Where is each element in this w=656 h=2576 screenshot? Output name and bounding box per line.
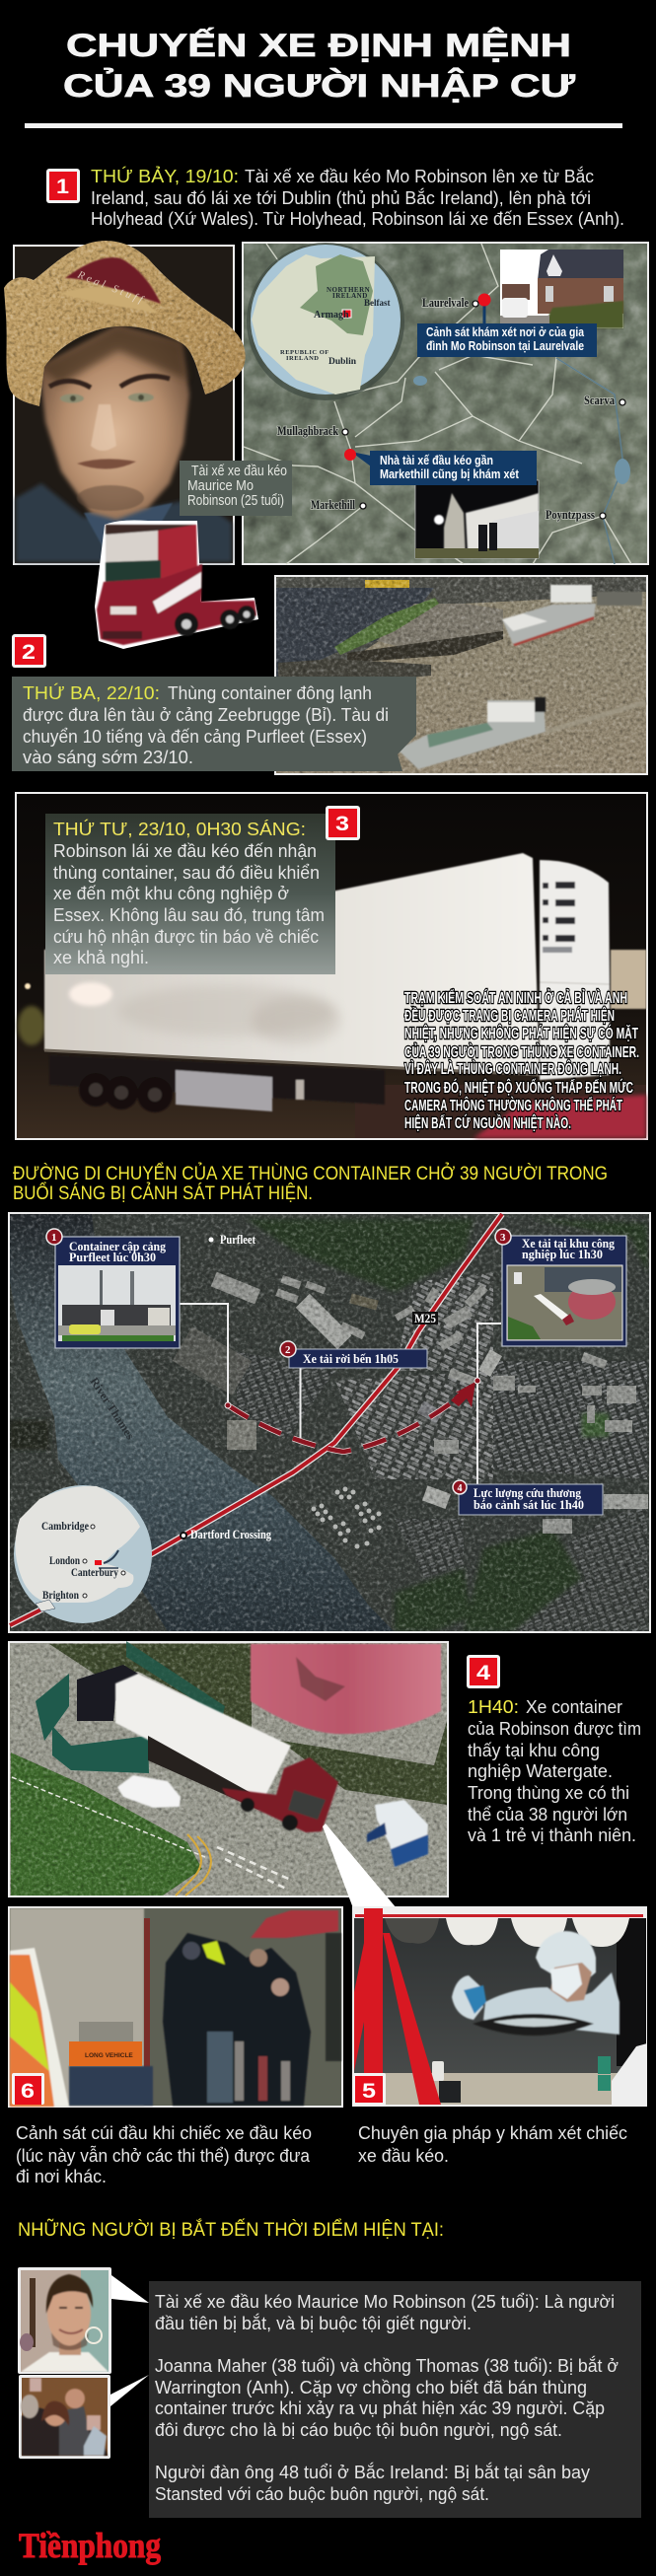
driver label: Maurice Mo (187, 477, 254, 494)
step 1 text (91, 166, 624, 229)
globe inset (247, 243, 404, 400)
title (63, 28, 576, 104)
step 3 text box: cứu hộ nhận được tin báo về chiếc (53, 926, 319, 947)
label: Purfleet (209, 1233, 256, 1247)
route heading (13, 1161, 608, 1204)
panel: driver portrait: Real Stuff (75, 268, 146, 307)
panel: aerial photo of truck at Watergate (8, 1641, 449, 1897)
panel: forensic expert in cab photo (352, 1906, 647, 2107)
step 5 badge: 5 (362, 2080, 376, 2103)
map place labels (277, 394, 625, 522)
step 4 text: Xe container (526, 1696, 622, 1717)
step 1 text: Holyhead (Xứ Wales). Từ Holyhead, Robinson lái xe đến Essex (Anh). (91, 208, 624, 229)
driver label (180, 461, 292, 516)
arrests text box: Người đàn ông 48 tuổi ở Bắc Ireland: Bị bắt tại sân bay (155, 2462, 591, 2482)
step 4 text: của Robinson được tìm (468, 1718, 641, 1739)
arrests text box: đầu tiên bị bắt, và bị buộc tội giết người. (155, 2313, 472, 2333)
callout: Markethill search: Nhà tài xế đầu kéo gần (380, 454, 493, 467)
house photo (500, 250, 623, 328)
vegetation behind truck (49, 1644, 447, 1805)
pointer: Mahers to text (110, 2375, 149, 2406)
pointer to cab photo (323, 1824, 397, 1908)
step 6 badge (12, 2073, 44, 2105)
callout: Markethill search (344, 449, 537, 485)
step 3 text box: Robinson lái xe đầu kéo đến nhận (53, 840, 317, 861)
step 3 text box: Essex. Không lâu sau đó, trung tâm (53, 904, 325, 925)
arrests text box (149, 2281, 641, 2518)
callout 2: truck leaves: Xe tải rời bến 1h05 (303, 1352, 399, 1366)
trailer body (44, 853, 540, 1075)
arrests text box: đôi được cho là bị cáo buộc tội buôn người, ngộ sát. (155, 2419, 562, 2440)
van with chevrons (10, 1948, 69, 2107)
callout 4: rescue alerts police: Lực lượng cứu thương (474, 1486, 582, 1500)
canopy and fence (77, 1665, 138, 1721)
step 4 text: thể của 38 người lớn (468, 1804, 627, 1825)
step 2 badge (12, 634, 46, 668)
label: Dartford Crossing: Dartford Crossing (190, 1528, 272, 1541)
face (39, 325, 189, 520)
callout: Markethill search: Markethill cũng bị khám xét (380, 467, 520, 481)
map place labels: Markethill (311, 498, 355, 512)
callout 1: container arrives: Purfleet lúc 0h30 (69, 1251, 156, 1264)
port land and mudflat (276, 577, 646, 682)
arrests text box: Stansted với cáo buộc buôn người, ngộ sát. (155, 2483, 489, 2504)
forensic expert (452, 1931, 620, 2036)
satellite base layer (10, 1214, 649, 1631)
green land patches (10, 1219, 647, 1631)
step 4 text: nghiệp Watergate. (468, 1760, 613, 1781)
red grille stripes (354, 1908, 441, 2106)
title: CHUYẾN XE ĐỊNH MỆNH (66, 28, 571, 63)
south-east England inset map: Brighton (42, 1590, 80, 1602)
south-east England inset map: London (49, 1555, 80, 1567)
pointer: Robinson to text (111, 2275, 149, 2303)
caption: police bow heads: (lúc này vẫn chở các thi thể) được đưa (16, 2145, 311, 2166)
step 1 badge (46, 169, 80, 203)
globe inset: Dublin (328, 357, 357, 367)
caption: police bow heads (16, 2122, 312, 2186)
south-east England inset map: Canterbury (71, 1567, 118, 1579)
globe inset: NORTHERN (327, 286, 370, 294)
river Thames (10, 1214, 394, 1631)
connector lines (180, 1304, 501, 1484)
panel: police at scene photo: LONG VEHICLE (85, 2052, 133, 2059)
driver label: Tài xế xe đầu kéo (191, 463, 287, 479)
step 4 text: 1H40: (468, 1696, 519, 1717)
callout: Laurelvale search: đình Mo Robinson tại Laurelvale (426, 339, 584, 353)
oil storage tank farm (312, 1487, 381, 1548)
road network (244, 244, 631, 564)
step 3 badge: 3 (335, 813, 349, 835)
callout 3: truck at industrial park (495, 1229, 626, 1346)
callout 3: truck at industrial park: Xe tải tại khu công (522, 1237, 616, 1251)
callout 4: rescue alerts police: báo cảnh sát lúc 1h40 (474, 1498, 584, 1512)
undercarriage and wheels (49, 1055, 385, 1112)
step 2 text box: vào sáng sớm 23/10. (23, 747, 193, 767)
panel: Northern Ireland map (242, 242, 649, 565)
callout 1: container arrives: 1 (51, 1232, 57, 1244)
jacket (16, 483, 232, 562)
driver label: Robinson (25 tuổi) (187, 492, 284, 509)
red tractor cab (222, 1757, 338, 1832)
step 3 text box: xe đến một khu công nghiệp ở (53, 883, 289, 903)
thermal camera note (404, 989, 639, 1132)
callout: Laurelvale search: Cảnh sát khám xét nơi ở của gia (426, 325, 585, 339)
callout 4: rescue alerts police (453, 1480, 603, 1515)
panel: aerial route map (8, 1212, 651, 1633)
map place labels: Mullaghbrack (277, 424, 338, 438)
thermal camera note: HIỆN BẤT CỨ NGUỒN NHIỆT NÀO. (404, 1114, 571, 1132)
globe inset: Armagh (314, 310, 349, 321)
callout 2: truck leaves: 2 (285, 1344, 291, 1356)
label: Purfleet: Purfleet (220, 1233, 256, 1247)
step 4 text (468, 1696, 641, 1845)
callout 1: container arrives (46, 1229, 180, 1348)
M25 label: M25 (414, 1312, 436, 1325)
step 2 text box: chuyển 10 tiếng và đến cảng Purfleet (Essex) (23, 726, 367, 747)
globe inset: IRELAND (286, 355, 319, 362)
callout 3: truck at industrial park: nghiệp lúc 1h30 (522, 1248, 603, 1261)
caption: forensic expert (358, 2122, 627, 2166)
urban texture areas (493, 1361, 647, 1479)
step 4 text: Trong thùng xe có thi (468, 1782, 629, 1803)
callout 4: rescue alerts police: 4 (458, 1483, 462, 1494)
logo: Tiền Phong: Tiềnphong (19, 2526, 161, 2565)
forensic tent (367, 1800, 428, 1867)
refrigeration unit (540, 860, 610, 1080)
night house photo (415, 480, 539, 558)
globe inset: REPUBLIC OF (280, 349, 329, 356)
step 6 badge: 6 (21, 2080, 35, 2103)
cut-out truck illustration (95, 521, 258, 649)
map place labels: Poyntzpass (546, 508, 595, 522)
step 3 text box: THỨ TƯ, 23/10, 0H30 SÁNG: (53, 819, 306, 839)
arrests heading: NHỮNG NGƯỜI BỊ BẮT ĐẾN THỜI ĐIỂM HIỆN TẠI: (18, 2217, 444, 2241)
cab dashboard (354, 2073, 645, 2105)
step 1 badge: 1 (56, 176, 69, 198)
step 1 text: Tài xế xe đầu kéo Mo Robinson lên xe từ Bắc (245, 166, 594, 186)
police group (163, 1933, 341, 2106)
route heading: BUỔI SÁNG BỊ CẢNH SÁT PHÁT HIỆN. (13, 1181, 313, 1204)
title: CỦA 39 NGƯỜI NHẬP CƯ (63, 68, 576, 104)
south-east England inset map: Cambridge (41, 1521, 89, 1533)
callout: Laurelvale search (417, 294, 597, 357)
background buildings and lights (611, 950, 646, 1009)
step 4 badge (467, 1655, 500, 1688)
step 3 text box: xe khả nghi. (53, 947, 149, 967)
arrests text box: Tài xế xe đầu kéo Maurice Mo Robinson (25 tuổi): Là người (155, 2291, 615, 2312)
step 3 text box: thùng container, sau đó điều khiển (53, 862, 320, 883)
caption: forensic expert: xe đầu kéo. (358, 2145, 449, 2166)
step 4 text: và 1 trẻ vị thành niên. (468, 1825, 636, 1845)
step 2 badge: 2 (22, 641, 36, 664)
docked ferry (502, 585, 642, 646)
orange vehicle plate (69, 2041, 142, 2066)
step 1 text: Ireland, sau đó lái xe tới Dublin (thủ phủ Bắc Ireland), lên phà tới (91, 187, 591, 208)
hat (4, 241, 246, 406)
photo: Maurice Robinson (18, 2267, 111, 2374)
ferry at sea (398, 697, 646, 769)
M25 motorway (10, 1214, 502, 1625)
step 3 text box (45, 814, 335, 974)
arrests text box: container trước khi xảy ra vụ phát hiện xác 39 người. Cặp (155, 2397, 605, 2418)
arrests text box: Joanna Maher (38 tuổi) và chồng Thomas (38 tuổi): Bị bắt ở (155, 2355, 619, 2376)
step 3 badge (326, 806, 360, 840)
globe inset: IRELAND (332, 292, 368, 300)
step 4 text: thấy tại khu công (468, 1740, 600, 1760)
step 2 text box (12, 677, 416, 771)
arrests text box: Warrington (Anh). Cặp vợ chồng cho biết đã bán thùng (155, 2377, 587, 2397)
step 5 badge (352, 2073, 386, 2106)
white trailer (115, 1674, 291, 1800)
panel: driver portrait (4, 241, 292, 564)
step 4 badge: 4 (476, 1662, 490, 1684)
grass verge (11, 1753, 202, 1896)
callout: Laurelvale search: Laurelvale (422, 296, 469, 310)
callout 2: truck leaves (280, 1341, 427, 1368)
step 1 text: THỨ BẢY, 19/10: (91, 166, 239, 186)
industrial buildings (173, 1272, 648, 1534)
eyebrows and eyes (49, 376, 170, 511)
red gas tank (251, 1644, 441, 1734)
red car (251, 1910, 338, 1938)
caption: forensic expert: Chuyên gia pháp y khám xét chiếc (358, 2122, 627, 2143)
callout 1: container arrives: Container cập cảng (69, 1240, 167, 1253)
panel: refrigerated trailer photo (15, 792, 648, 1140)
caption: police bow heads: Cảnh sát cúi đầu khi chiếc xe đầu kéo (16, 2122, 312, 2143)
photo: Joanna and Thomas Maher (19, 2375, 110, 2459)
white van (117, 1775, 181, 1808)
caption: police bow heads: đi nơi khác. (16, 2166, 107, 2186)
panel: ferry port photo (274, 575, 648, 775)
windscreen top trim (354, 1908, 645, 1918)
label: River Thames: River Thames (87, 1375, 138, 1442)
callout 3: truck at industrial park: 3 (500, 1232, 506, 1244)
truck route dashes (228, 1382, 475, 1452)
step 2 text box: Thùng container đông lạnh (168, 682, 372, 703)
globe inset: Belfast (364, 298, 391, 308)
step 2 text box: được đưa lên tàu ở cảng Zeebrugge (Bỉ). Tàu di (23, 704, 389, 725)
south-east England inset map (14, 1485, 152, 1623)
truck side (10, 1908, 144, 2106)
step 2 text box: THỨ BA, 22/10: (23, 682, 160, 703)
panel: police at scene photo (8, 1906, 343, 2108)
map place labels: Scarva (584, 394, 616, 407)
